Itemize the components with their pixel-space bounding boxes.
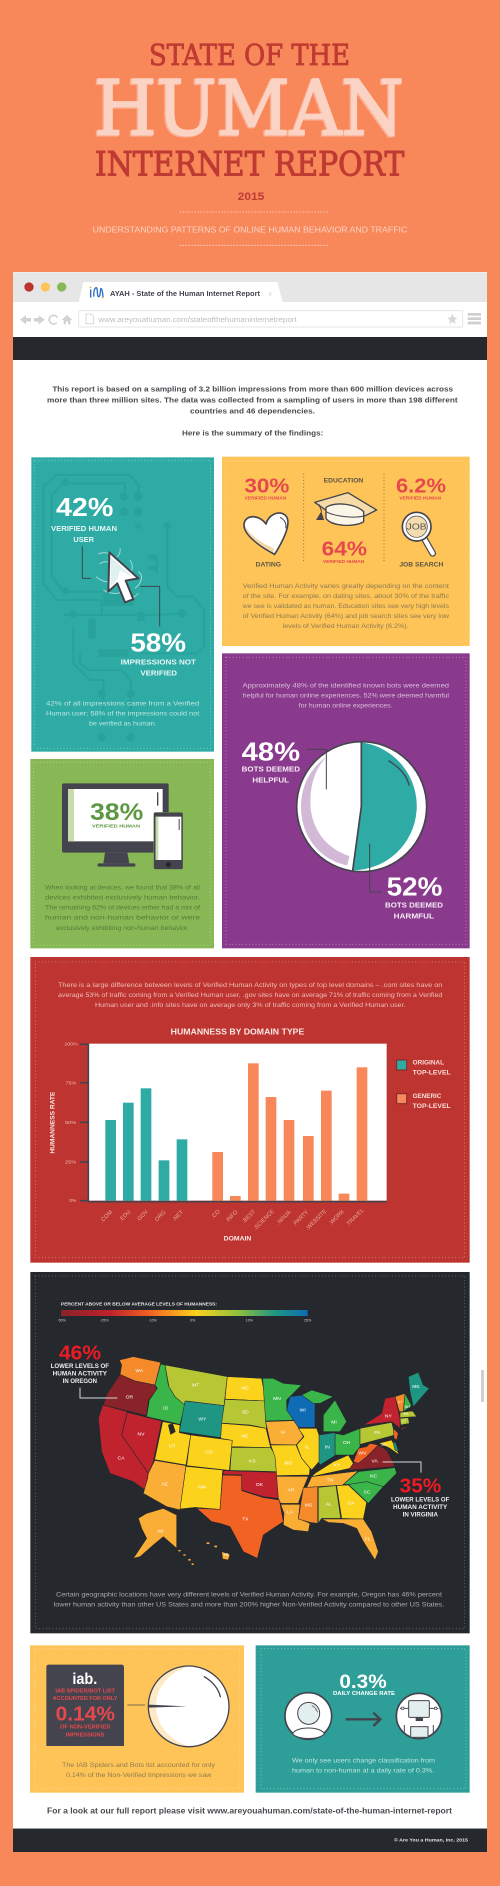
label: bots deemed helpful: HELPFUL <box>252 776 290 785</box>
scrollbar <box>481 1370 484 1402</box>
us map: OH <box>343 1440 351 1446</box>
label: verified human: VERIFIED HUMAN <box>92 824 140 830</box>
label: verified human user: VERIFIED HUMAN <box>51 524 117 533</box>
label: verified human user: USER <box>73 535 95 544</box>
icon: cursor <box>96 548 142 602</box>
x axis labels: .NINJA <box>276 1209 293 1226</box>
icon: magnifier <box>402 512 433 553</box>
us map: AK <box>157 1528 164 1534</box>
callout: virginia: IN VIRGINIA <box>403 1512 439 1518</box>
text block: we see is validated as human. Education sites see very high levels <box>242 603 450 610</box>
text block: devices exhibited exclusively human behavior. <box>45 895 200 902</box>
icon: robot <box>396 1693 442 1739</box>
us map: WY <box>198 1417 207 1423</box>
title: human: HUMAN <box>94 63 404 152</box>
us map: NY <box>385 1413 392 1419</box>
text block: be verified as human. <box>89 721 157 728</box>
map legend: 0% <box>190 1319 196 1323</box>
header: report title <box>93 38 407 245</box>
stat: 0.3%: 0.3% <box>339 1672 387 1693</box>
iab box: IAB SPIDER/BOT LIST <box>55 1688 116 1694</box>
icon: graduation cap <box>315 493 377 525</box>
label: daily change rate: DAILY CHANGE RATE <box>333 1691 395 1697</box>
us map: IL <box>305 1445 310 1451</box>
us map: KS <box>249 1458 256 1464</box>
text block: When looking at devices, we found that 38% of all <box>45 885 201 892</box>
label: bots deemed harmful: BOTS DEEMED <box>385 901 443 910</box>
text block <box>243 683 450 710</box>
text block: Human user; 58% of the impressions could not <box>46 711 199 718</box>
us map: PA <box>374 1430 381 1436</box>
us map: MN <box>273 1396 281 1402</box>
stat: job search 6.2%: VERIFIED HUMAN <box>399 495 442 500</box>
intro text: Here is the summary of the findings: <box>182 428 323 437</box>
label: dating: DATING <box>256 561 281 568</box>
us map: UT <box>169 1444 176 1450</box>
x axis labels: .COM <box>99 1209 114 1224</box>
title: human: HUMAN <box>93 64 403 153</box>
x axis labels: .EDU <box>118 1209 132 1223</box>
callout: oregon: IN OREGON <box>63 1379 97 1385</box>
stat: 42%: 42% <box>56 492 113 522</box>
us map: ID <box>163 1406 169 1412</box>
x axis labels: .WEBSITE <box>305 1208 328 1232</box>
address bar: www.areyouahuman.com/stateofthehumaninternetreport <box>97 317 297 324</box>
text block: The remaining 62% of devices either had a mix of <box>45 905 200 912</box>
text block: 0.14% of the Non-Verified Impressions we saw <box>66 1772 212 1779</box>
us map: MD <box>381 1443 387 1447</box>
iab box: IMPRESSIONS <box>66 1732 105 1738</box>
arrow <box>346 1713 380 1726</box>
text block: human and non-human behavior or were <box>45 915 200 922</box>
label: impressions not verified: VERIFIED <box>140 668 177 677</box>
iab box: iab. <box>72 1671 97 1688</box>
legend <box>397 1060 451 1110</box>
us map: OK <box>256 1482 264 1488</box>
bar chart <box>50 1042 387 1243</box>
nav icons <box>20 315 72 324</box>
callout: oregon: HUMAN ACTIVITY <box>53 1372 107 1378</box>
label: impressions not verified: IMPRESSIONS NOT <box>121 658 197 667</box>
text block: There is a large difference between levels of Verified Human Activity on types of top level domains – .com sites have on <box>58 982 443 989</box>
x axis labels: .SCIENCE <box>253 1209 276 1232</box>
text block: Approximately 48% of the identified known bots were deemed <box>243 683 449 690</box>
icon: monitor <box>62 783 169 867</box>
iab box: 0.14% <box>56 1703 115 1726</box>
text block <box>292 1758 435 1775</box>
us map: WA <box>135 1368 144 1374</box>
map legend: PERCENT ABOVE OR BELOW AVERAGE LEVELS OF HUMANNESS: <box>61 1302 217 1308</box>
text block <box>62 1762 216 1779</box>
us map: FL <box>365 1537 371 1543</box>
us map: KY <box>334 1462 341 1468</box>
x axis labels: .CO <box>210 1209 222 1220</box>
us map: WV <box>358 1451 367 1457</box>
text block: lower human activity than other US States and more than 200% higher Non-Verified Activity compared to other US States. <box>54 1602 444 1609</box>
panel: verified human user <box>31 457 214 752</box>
y axis labels: 25% <box>65 1160 77 1166</box>
us map: NE <box>242 1433 249 1439</box>
text block <box>54 1592 444 1609</box>
text block: The IAB Spiders and Bots list accounted for only <box>62 1762 216 1769</box>
label: bots deemed helpful <box>242 765 300 785</box>
legend: GENERIC <box>413 1093 442 1100</box>
text block: Verified Human Activity varies greatly depending on the content <box>243 583 449 590</box>
us map: VA <box>372 1458 378 1464</box>
panel: content categories <box>222 457 470 646</box>
browser tab: AYAH - State of the Human Internet Report <box>110 289 260 298</box>
callout: virginia: 35% <box>400 1475 441 1498</box>
map legend: 10% <box>246 1319 254 1323</box>
text block: average 53% of traffic coming from a Verified Human user, .gov sites have on average 71% of traffic coming from a Verified <box>58 992 443 999</box>
year: 2015 <box>238 191 264 203</box>
map legend <box>57 1302 312 1323</box>
icon: human <box>285 1693 332 1739</box>
iab box: ACCOUNTED FOR ONLY <box>53 1696 118 1702</box>
y axis labels <box>64 1042 78 1204</box>
text block: Certain geographic locations have very different levels of Verified Human Activity. For example, Oregon has 46% percent <box>56 1592 442 1599</box>
text block: helpful for human online experiences. 52% were deemed harmful <box>243 693 450 700</box>
label: bots deemed helpful: BOTS DEEMED <box>242 765 300 774</box>
us map: VT <box>398 1401 402 1405</box>
us map <box>98 1357 429 1565</box>
subtitle: UNDERSTANDING PATTERNS OF ONLINE HUMAN BEHAVIOR AND TRAFFIC <box>93 224 407 234</box>
panel: devices <box>30 759 214 948</box>
text block: levels of Verified Human Activity (6.2%). <box>283 623 409 630</box>
title: state of the: STATE OF THE <box>149 38 350 72</box>
stat: dating 30%: 30% <box>244 474 289 497</box>
y axis labels: 100% <box>64 1042 78 1048</box>
original top-level bars <box>105 1088 187 1201</box>
label: education: EDUCATION <box>324 477 364 484</box>
us map: MS <box>305 1503 313 1509</box>
us map: HI <box>223 1552 228 1558</box>
x axis labels: .WORK <box>328 1209 346 1227</box>
x axis labels: .PARTY <box>292 1209 310 1228</box>
map legend: -50% <box>57 1319 67 1323</box>
us map: TX <box>242 1516 249 1522</box>
footer bar <box>13 1828 487 1852</box>
y axis title: HUMANNESS RATE <box>50 1092 56 1154</box>
window buttons <box>24 282 66 292</box>
stat: 38%: 38% <box>90 799 143 826</box>
us map: AR <box>288 1488 295 1494</box>
stat: 52%: 52% <box>387 871 442 901</box>
footer bar: © Are You a Human, Inc. 2015 <box>394 1838 469 1842</box>
intro text: more than three million sites. The data was collected from a sampling of users in more than 198 different <box>47 395 458 404</box>
x axis labels <box>99 1208 366 1232</box>
us map: ND <box>241 1386 249 1392</box>
us map: GA <box>347 1501 355 1507</box>
chart title: HUMANNESS BY DOMAIN TYPE <box>171 1028 305 1037</box>
text block: Human user and .info sites have on average only 3% of traffic coming from a Verified Human user. <box>95 1002 406 1009</box>
stat: education 64%: VERIFIED HUMAN <box>323 559 365 564</box>
x axis labels: .ORG <box>153 1210 168 1224</box>
menu icon <box>468 314 481 323</box>
x axis title: DOMAIN <box>224 1236 252 1243</box>
text block <box>58 982 443 1009</box>
stat: job search 6.2%: 6.2% <box>396 474 446 497</box>
map legend: -25% <box>100 1319 109 1323</box>
iab box: OF NON-VERIFIED <box>60 1724 110 1730</box>
x axis labels: .INFO <box>224 1209 240 1224</box>
generic top-level bars <box>212 1063 367 1201</box>
legend: TOP-LEVEL <box>413 1103 451 1110</box>
label: impressions not verified <box>121 658 197 677</box>
panel: us map <box>30 1272 470 1633</box>
text block <box>45 885 201 932</box>
us map: MA <box>403 1412 409 1416</box>
stat: dating 30%: VERIFIED HUMAN <box>245 496 287 501</box>
pie chart <box>297 742 427 872</box>
panel: daily change rate <box>256 1645 470 1793</box>
stat: 58%: 58% <box>130 628 186 658</box>
label: bots deemed harmful: HARMFUL <box>394 912 435 921</box>
intro text <box>47 384 458 437</box>
us map: AZ <box>161 1481 168 1487</box>
text block: 42% of all impressions came from a Verified <box>46 701 200 708</box>
callout: oregon: LOWER LEVELS OF <box>51 1364 109 1370</box>
us map: MT <box>192 1382 199 1388</box>
text block: We only see users change classification from <box>292 1758 435 1765</box>
us map: SD <box>242 1410 249 1416</box>
us map: OR <box>126 1395 133 1401</box>
text block <box>46 701 200 728</box>
label: verified human user <box>51 524 117 544</box>
stat: 48%: 48% <box>242 737 300 767</box>
y axis labels: 0% <box>69 1198 77 1204</box>
panel: humanness by domain type <box>30 957 470 1263</box>
us map: CA <box>118 1455 125 1461</box>
text block: for human online experiences. <box>299 703 393 710</box>
circuit background <box>43 475 204 741</box>
us map: ME <box>412 1384 420 1390</box>
text block <box>242 583 450 630</box>
icon: magnifier: JOB <box>407 522 427 532</box>
us map: MO <box>284 1460 292 1466</box>
map legend: 25% <box>304 1319 312 1323</box>
us map: NH <box>405 1405 410 1409</box>
us map: NV <box>138 1432 145 1438</box>
browser chrome <box>13 272 487 360</box>
us map: LA <box>287 1510 294 1516</box>
panel: bots pie chart <box>222 653 470 948</box>
us map: SC <box>364 1489 371 1495</box>
callout: oregon <box>51 1341 117 1398</box>
us map: IN <box>325 1444 330 1450</box>
address bar <box>79 311 463 327</box>
us map: WI <box>300 1408 306 1414</box>
map legend: -10% <box>148 1319 158 1323</box>
text block: exclusively exhibiting non-human behavior. <box>56 925 189 932</box>
callout: oregon: 46% <box>59 1341 101 1364</box>
intro text: countries and 46 dependencies. <box>190 406 315 415</box>
us map: NC <box>370 1474 378 1480</box>
intro text: This report is based on a sampling of 3.2 billion impressions from more than 600 million devices across <box>52 384 453 393</box>
title: internet report: INTERNET REPORT <box>95 144 405 183</box>
browser tab: x <box>268 289 272 298</box>
us map: MI <box>331 1420 337 1426</box>
callout: virginia: LOWER LEVELS OF <box>391 1497 450 1503</box>
label: job search: JOB SEARCH <box>399 561 444 568</box>
footer link text: For a look at our full report please visit www.areyouahuman.com/state-of-the-human-internet-report <box>47 1807 452 1816</box>
callout: virginia <box>383 1462 450 1518</box>
x axis labels: .BEST <box>241 1209 258 1225</box>
us map: CT <box>402 1419 406 1423</box>
x axis labels: .GOV <box>135 1209 150 1223</box>
y axis labels: 75% <box>66 1080 77 1086</box>
us map: TN <box>327 1478 334 1484</box>
label: bots deemed harmful <box>385 901 443 921</box>
y axis labels: 50% <box>65 1120 77 1126</box>
legend: TOP-LEVEL <box>413 1070 451 1077</box>
us map: AL <box>326 1502 332 1508</box>
pie icon <box>127 1666 229 1747</box>
us map: IA <box>281 1430 286 1436</box>
text block: human to non-human at a daily rate of 0.3%. <box>292 1768 434 1775</box>
icon: heart <box>244 513 288 554</box>
page container <box>13 272 487 1828</box>
x axis labels: .NET <box>172 1209 185 1223</box>
text block: of Verified Human Activity (64%) and job search sites see very low <box>243 613 449 620</box>
text block: of the site. For example, on dating sites, about 30% of the traffic <box>243 593 450 600</box>
us map: NM <box>198 1485 206 1491</box>
browser tab <box>79 282 283 302</box>
us map: CO <box>205 1449 213 1455</box>
icon: phone <box>154 812 183 869</box>
x axis labels: .TRAVEL <box>345 1208 366 1228</box>
iab box <box>46 1665 124 1746</box>
legend: ORIGINAL <box>413 1060 444 1067</box>
stat: education 64%: 64% <box>322 537 367 560</box>
panel: iab list <box>30 1645 244 1793</box>
callout: virginia: HUMAN ACTIVITY <box>393 1505 447 1511</box>
